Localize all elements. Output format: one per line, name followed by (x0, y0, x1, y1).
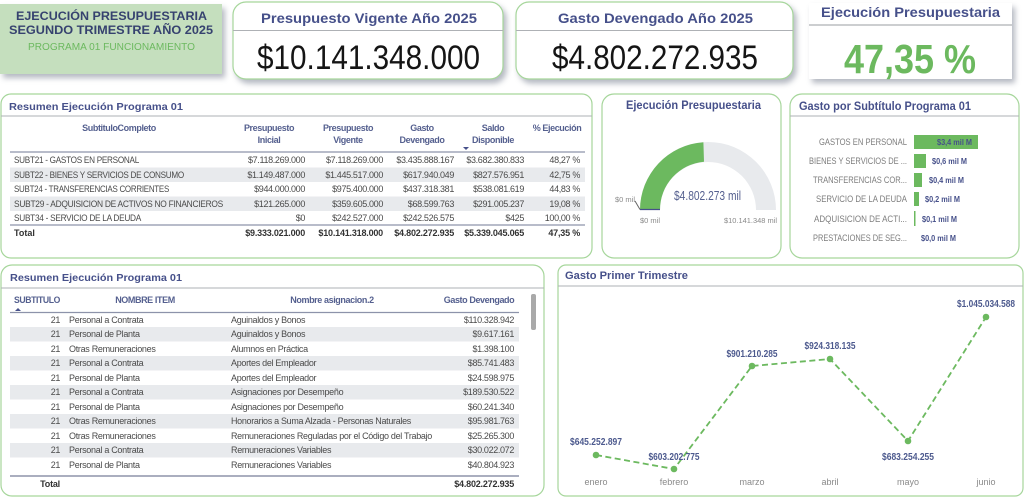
table row: subtítulo 29: $68.599.763 (408, 199, 454, 209)
detail rows: 21 (51, 373, 60, 383)
bar: gastos en personal (819, 135, 978, 149)
panel: gasto por subtítulo bar chart (790, 94, 1019, 258)
KPI card: presupuesto vigente (233, 2, 503, 79)
detail rows: 21 (51, 329, 60, 339)
table row: subtítulo 22 (14, 170, 580, 180)
line chart month axis: abril (821, 477, 839, 487)
line chart month axis: enero (584, 477, 608, 487)
bar: gastos en personal: GASTOS EN PERSONAL (819, 137, 907, 148)
table total row (14, 228, 580, 238)
table row: subtítulo 21: $3.682.380.833 (466, 155, 524, 165)
table row: subtítulo 29: $121.265.000 (254, 199, 305, 209)
table row: subtítulo 22: $617.940.049 (403, 170, 454, 180)
table column headers: Gasto (410, 123, 435, 133)
table row: subtítulo 24: $538.081.619 (473, 184, 524, 194)
gauge chart (615, 142, 777, 225)
KPI card: gasto devengado (516, 2, 793, 79)
table row: subtítulo 21: $7.118.269.000 (248, 155, 305, 165)
table column headers: Disponible (472, 135, 514, 145)
detail rows: 21 (51, 445, 60, 455)
table row: subtítulo 21: SUBT21 - GASTOS EN PERSONAL (14, 155, 139, 165)
table total row: $5.339.045.065 (464, 228, 524, 238)
detail rows: $110.328.942 (464, 315, 514, 325)
bar: transferencias: $0,4 mil M (929, 175, 964, 185)
gauge chart: $4.802.273 mil (674, 188, 741, 203)
detail rows: $60.241.340 (468, 402, 514, 412)
detail rows: 21 (51, 358, 60, 368)
header block: report title: PROGRAMA 01 FUNCIONAMIENTO (28, 41, 195, 53)
table row: subtítulo 34: $425 (505, 213, 524, 223)
detail rows: $25.265.300 (468, 431, 514, 441)
table row: subtítulo 34: $0 (296, 213, 305, 223)
bar: bienes y servicios (809, 154, 967, 168)
detail rows: 21 (51, 344, 60, 354)
table total row: $10.141.318.000 (318, 228, 383, 238)
bar: servicio de la deuda: SERVICIO DE LA DEUDA (816, 194, 908, 205)
line chart month axis: junio (975, 477, 996, 487)
KPI card: presupuesto vigente: $10.141.348.000 (257, 39, 480, 77)
panel: gauge (602, 94, 781, 258)
table row: subtítulo 29: 19,08 % (549, 199, 580, 209)
detail table total row: $4.802.272.935 (454, 479, 514, 489)
header block: report title (0, 4, 222, 74)
detail table column headers: Nombre asignacion.2 (290, 295, 374, 305)
detail rows: Remuneraciones Variables (231, 445, 332, 455)
detail rows: Aguinaldos y Bonos (231, 329, 306, 339)
table column headers (82, 123, 581, 150)
table total row: $4.802.272.935 (394, 228, 454, 238)
KPI card: gasto devengado: Gasto Devengado Año 2025 (558, 10, 753, 26)
bar: servicio de la deuda (816, 192, 960, 206)
header block: report title: SEGUNDO TRIMESTRE AÑO 2025 (9, 24, 214, 37)
table row: subtítulo 24: $975.400.000 (332, 184, 383, 194)
gauge chart: $0 mil (615, 195, 635, 204)
bar: transferencias (813, 173, 964, 187)
detail table total row (40, 479, 514, 489)
detail rows (51, 315, 514, 470)
table row: subtítulo 29: SUBT29 - ADQUISICION DE ACTIVOS NO FINANCIEROS (14, 199, 223, 209)
KPI card: presupuesto vigente: Presupuesto Vigente Año 2025 (261, 10, 477, 26)
table row: subtítulo 29 (14, 199, 580, 209)
table row: subtítulo 24 (14, 184, 580, 194)
KPI card: porcentaje de ejecución: Ejecución Presupuestaria (821, 5, 1001, 20)
table row: subtítulo 21: $7.118.269.000 (326, 155, 383, 165)
detail rows: $1.398.100 (472, 344, 514, 354)
detail rows: 21 (51, 416, 60, 426)
bar: servicio de la deuda: $0,2 mil M (925, 194, 960, 204)
table row: subtítulo 21: $3.435.888.167 (396, 155, 454, 165)
detail rows: Personal a Contrata (69, 315, 144, 325)
line chart month axis: mayo (897, 477, 919, 487)
detail rows: Aguinaldos y Bonos (231, 315, 306, 325)
table row: subtítulo 22: $1.149.487.000 (247, 170, 305, 180)
table row: subtítulo 34: $242.527.000 (332, 213, 383, 223)
table column headers: Inicial (258, 135, 280, 145)
line chart data labels: $645.252.897 (570, 436, 622, 448)
detail table column headers: Gasto Devengado (444, 295, 515, 305)
table total row: $9.333.021.000 (245, 228, 305, 238)
line chart month axis: febrero (660, 477, 688, 487)
table column headers: Presupuesto (323, 123, 374, 133)
gauge heading: Ejecución Presupuestaria (626, 100, 762, 112)
detail rows: $24.598.975 (468, 373, 514, 383)
line chart data labels: $901.210.285 (726, 348, 778, 360)
table row: subtítulo 29: $359.605.000 (332, 199, 383, 209)
detail rows: Otras Remuneraciones (69, 344, 156, 354)
table row: subtítulo 34 (14, 213, 580, 223)
scrollbar (531, 294, 536, 330)
detail rows: 21 (51, 431, 60, 441)
detail table column headers: SUBTITULO (14, 295, 60, 305)
table row: subtítulo 24: $944.000.000 (254, 184, 305, 194)
table total row: Total (14, 228, 35, 238)
detail table column headers: NOMBRE ITEM (115, 295, 175, 305)
detail rows: Aportes del Empleador (231, 358, 317, 368)
line chart heading: Gasto Primer Trimestre (565, 270, 688, 282)
gauge chart: $0 mil (640, 216, 660, 225)
detail rows: $189.530.522 (463, 387, 514, 397)
line chart series (593, 314, 989, 472)
detail rows: $40.804.923 (468, 460, 514, 470)
detail rows: Personal a Contrata (69, 358, 144, 368)
header block: report title: EJECUCIÓN PRESUPUESTARIA (16, 10, 207, 23)
panel: detalle por asignación table (1, 265, 544, 496)
bar: adquisición de activos: $0,1 mil M (922, 214, 957, 224)
table row: subtítulo 24: $437.318.381 (403, 184, 454, 194)
table column headers: Vigente (333, 135, 363, 145)
detail table total row: Total (40, 479, 60, 489)
detail rows: $30.022.072 (468, 445, 514, 455)
bar: gastos en personal: $3,4 mil M (937, 137, 972, 147)
table row: subtítulo 34: $242.526.575 (403, 213, 454, 223)
detail rows: Personal a Contrata (69, 387, 144, 397)
table row: subtítulo 34: 100,00 % (545, 213, 580, 223)
table row: subtítulo 22: SUBT22 - BIENES Y SERVICIOS DE CONSUMO (14, 170, 184, 180)
table row: subtítulo 24: SUBT24 - TRANSFERENCIAS CORRIENTES (14, 184, 169, 194)
line chart data labels: $603.202.775 (648, 451, 700, 463)
table row: subtítulo 34: SUBT34 - SERVICIO DE LA DEUDA (14, 213, 141, 223)
detail rows: Personal de Planta (69, 329, 140, 339)
table row: subtítulo 21 (14, 155, 580, 165)
bar: transferencias: TRANSFERENCIAS COR... (813, 175, 907, 186)
detail rows: Personal de Planta (69, 373, 140, 383)
table column headers: Presupuesto (244, 123, 295, 133)
line chart month axis (584, 477, 996, 487)
detail rows: 21 (51, 387, 60, 397)
detail rows: 21 (51, 402, 60, 412)
table column headers: Saldo (482, 123, 505, 133)
table row: subtítulo 22: $827.576.951 (473, 170, 524, 180)
detail table heading: Resumen Ejecución Programa 01 (10, 272, 182, 284)
panel: resumen ejecución table (1, 94, 592, 258)
detail rows: 21 (51, 315, 60, 325)
detail rows: Remuneraciones Variables (231, 460, 332, 470)
bar: prestaciones: PRESTACIONES DE SEG... (813, 233, 907, 244)
detail rows: Remuneraciones Reguladas por el Código del Trabajo (231, 431, 432, 441)
table column headers: SubtituloCompleto (82, 123, 157, 133)
table total row: 47,35 % (548, 228, 580, 238)
detail rows: Personal a Contrata (69, 445, 144, 455)
table row: subtítulo 22: $1.445.517.000 (325, 170, 383, 180)
bar: bienes y servicios: BIENES Y SERVICIOS DE ... (809, 156, 907, 167)
table row: subtítulo 29: $291.005.237 (473, 199, 524, 209)
detail rows: Personal de Planta (69, 460, 140, 470)
line chart data labels: $683.254.255 (882, 451, 934, 463)
table row: subtítulo 24: 44,83 % (549, 184, 580, 194)
bar chart heading: Gasto por Subtítulo Programa 01 (799, 101, 972, 113)
gauge chart: $10.141.348 mil (724, 216, 777, 225)
KPI card: porcentaje de ejecución: 47,35 % (844, 36, 976, 82)
detail rows: Asignaciones por Desempeño (231, 402, 344, 412)
detail rows: Asignaciones por Desempeño (231, 387, 344, 397)
detail rows: Aportes del Empleador (231, 373, 317, 383)
bar: bienes y servicios: $0,6 mil M (932, 156, 967, 166)
KPI card: gasto devengado: $4.802.272.935 (552, 39, 758, 77)
line chart month axis: marzo (739, 477, 765, 487)
detail rows: $95.981.763 (468, 416, 514, 426)
line chart data labels: $924.318.135 (804, 340, 856, 352)
bar: prestaciones: $0,0 mil M (921, 233, 956, 243)
table column headers: % Ejecución (533, 123, 581, 133)
KPI card: porcentaje de ejecución (809, 3, 1012, 82)
bar: adquisición de activos: ADQUISICION DE ACTI... (814, 214, 907, 225)
detail rows: Honorarios a Suma Alzada - Personas Naturales (231, 416, 412, 426)
detail table column headers (14, 295, 515, 311)
panel: gasto primer trimestre line chart (558, 265, 1023, 496)
table column headers: Devengado (400, 135, 445, 145)
detail rows: $85.741.483 (468, 358, 514, 368)
detail rows: $9.617.161 (472, 329, 514, 339)
table row: subtítulo 22: 42,75 % (549, 170, 580, 180)
line chart data labels (570, 298, 1015, 463)
detail rows: Alumnos en Práctica (231, 344, 308, 354)
table row: subtítulo 21: 48,27 % (549, 155, 580, 165)
detail rows: Personal de Planta (69, 402, 140, 412)
detail rows: 21 (51, 460, 60, 470)
bar: adquisición de activos (814, 211, 957, 226)
detail rows: Otras Remuneraciones (69, 416, 156, 426)
table heading: Resumen Ejecución Programa 01 (9, 101, 183, 113)
detail rows: Otras Remuneraciones (69, 431, 156, 441)
